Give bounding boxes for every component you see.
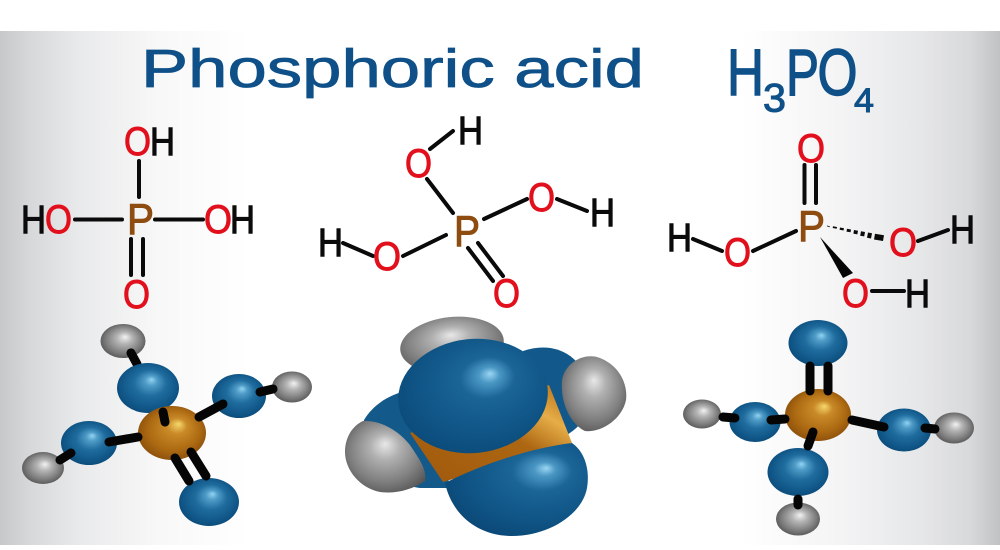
structural formula: right: O [724, 231, 751, 275]
structural formula: middle: H [318, 221, 343, 265]
structural formula: middle [318, 109, 615, 316]
space-filling model: center [345, 312, 626, 536]
structural formula: left: H [230, 198, 255, 242]
structural formula: left: O [124, 120, 151, 164]
structural formula: left: O [123, 273, 150, 317]
structural formula: right: O [797, 127, 825, 171]
structural formula: right: H [950, 208, 975, 252]
structural formula: right: O [889, 221, 917, 265]
structural formula: right: H [905, 272, 930, 316]
structural formula: right [667, 127, 975, 316]
structural formula: middle: P [454, 207, 480, 256]
structural formula: left: O [204, 198, 232, 242]
structural formula: left: H [150, 120, 175, 164]
structural formula: middle: O [493, 272, 520, 316]
structural formula: left [21, 120, 255, 317]
chemical formula [727, 35, 874, 120]
ball-and-stick model: right [683, 320, 974, 536]
structural formula: middle: O [373, 235, 401, 279]
structural formula: left: O [45, 198, 72, 242]
structural formula: right: O [842, 272, 869, 316]
chemical formula: P [786, 35, 819, 109]
structural formula: middle: H [458, 109, 483, 153]
structural formula: right: H [667, 216, 692, 260]
chemical formula: H [727, 35, 764, 109]
chemical formula: O [818, 35, 858, 109]
title: Phosphoric acid [141, 39, 644, 99]
chemical formula: 3 [763, 76, 786, 120]
structural formula: left: H [21, 198, 46, 242]
structural formula: middle: O [405, 142, 432, 186]
ball-and-stick model: left [22, 324, 312, 526]
structural formula: right: P [798, 202, 825, 251]
structural formula: middle: O [528, 176, 555, 220]
structural formula: left: P [127, 195, 154, 244]
chemical formula: 4 [854, 82, 874, 120]
structural formula: middle: H [590, 191, 615, 235]
